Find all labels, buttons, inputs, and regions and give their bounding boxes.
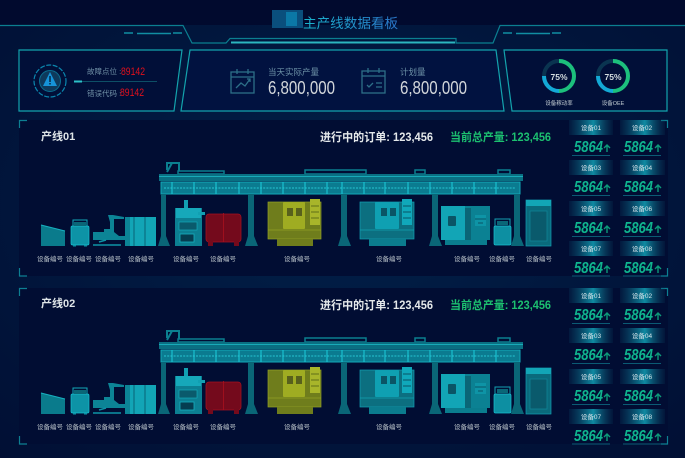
machine labels: 设备编号 — [454, 254, 480, 263]
total output: 当前总产量: 123,456 — [450, 130, 551, 144]
machine labels: 设备编号 — [376, 422, 402, 431]
actual output: 当天实际产量 — [268, 67, 320, 77]
device cards: 设备05 — [581, 372, 601, 381]
machine labels: 设备编号 — [489, 254, 516, 263]
donut: utilisation: 75% — [550, 72, 568, 82]
machine labels: 设备编号 — [37, 422, 64, 431]
fault points: 89142 — [121, 66, 145, 78]
error code: 89142 — [120, 87, 144, 99]
icon: actual output calendar — [231, 69, 254, 93]
device cards: 设备07 — [581, 412, 601, 421]
machine labels: 设备编号 — [128, 254, 154, 263]
machine labels: 设备编号 — [66, 422, 92, 431]
device cards — [569, 120, 665, 277]
donut: OEE: 75% — [604, 72, 622, 82]
device cards: 5864 — [624, 388, 653, 405]
title — [272, 10, 399, 31]
machine labels: 设备编号 — [173, 422, 200, 431]
total output: 当前总产量: 123,456 — [450, 298, 551, 312]
machine labels: 设备编号 — [454, 422, 480, 431]
machine labels — [37, 422, 552, 431]
device cards: 设备07 — [581, 244, 601, 253]
device cards: 设备02 — [632, 123, 652, 132]
machine labels: 设备编号 — [66, 254, 92, 263]
planned output: 6,800,000 — [400, 78, 467, 98]
device cards: 5864 — [574, 428, 603, 445]
machine labels: 设备编号 — [95, 422, 122, 431]
device cards: 5864 — [574, 307, 603, 324]
machine labels: 设备编号 — [210, 422, 236, 431]
device cards: 设备03 — [581, 331, 601, 340]
machine labels: 设备编号 — [210, 254, 236, 263]
device cards: 5864 — [574, 220, 603, 237]
device cards: 设备08 — [632, 412, 652, 421]
device cards: 5864 — [574, 260, 603, 277]
machine labels: 设备编号 — [284, 254, 310, 263]
device cards: 5864 — [574, 179, 603, 196]
donut: utilisation — [544, 61, 574, 107]
error code: 错误代码 : — [87, 88, 121, 98]
panel: alarms — [19, 50, 182, 111]
device cards: 设备04 — [632, 331, 652, 340]
device cards: 5864 — [574, 347, 603, 364]
device cards: 设备02 — [632, 291, 652, 300]
machine labels: 设备编号 — [526, 254, 552, 263]
machine labels — [37, 254, 552, 263]
icon: warning — [34, 65, 66, 97]
error code — [87, 87, 144, 99]
device cards: 设备08 — [632, 244, 652, 253]
device cards: 5864 — [574, 388, 603, 405]
machine labels: 设备编号 — [95, 254, 122, 263]
machine labels: 设备编号 — [376, 254, 402, 263]
device cards: 设备06 — [632, 204, 652, 213]
donut: OEE: 设备OEE — [602, 99, 625, 107]
device cards: 5864 — [624, 139, 653, 156]
production line machines — [41, 163, 551, 246]
fault points — [87, 66, 145, 78]
device cards: 5864 — [624, 428, 653, 445]
donut: utilisation: 设备稼动率 — [545, 99, 573, 107]
donut: OEE — [598, 61, 628, 107]
panel: line 02 — [19, 288, 668, 445]
heading: 产线02 — [41, 296, 75, 310]
actual output — [268, 67, 335, 98]
device cards: 设备01 — [581, 123, 601, 132]
machine labels: 设备编号 — [128, 422, 154, 431]
title: 主产线数据看板 — [303, 16, 399, 31]
machine labels: 设备编号 — [489, 422, 516, 431]
panel: line 01 — [19, 120, 668, 277]
panel: output — [181, 50, 504, 111]
orders in progress: 进行中的订单: 123,456 — [320, 298, 433, 312]
divider — [74, 80, 157, 82]
heading: 产线01 — [41, 129, 75, 143]
actual output: 6,800,000 — [268, 78, 335, 98]
machine labels: 设备编号 — [284, 422, 310, 431]
orders in progress: 进行中的订单: 123,456 — [320, 130, 433, 144]
machine labels: 设备编号 — [526, 422, 552, 431]
icon: plan calendar — [362, 68, 385, 93]
device cards: 设备03 — [581, 163, 601, 172]
device cards: 5864 — [624, 347, 653, 364]
device cards: 设备04 — [632, 163, 652, 172]
device cards: 5864 — [624, 179, 653, 196]
device cards: 设备01 — [581, 291, 601, 300]
device cards: 5864 — [624, 260, 653, 277]
device cards: 5864 — [624, 220, 653, 237]
device cards: 设备06 — [632, 372, 652, 381]
machine labels: 设备编号 — [173, 254, 200, 263]
production line machines — [41, 331, 551, 414]
device cards: 5864 — [624, 307, 653, 324]
planned output — [400, 67, 467, 98]
machine labels: 设备编号 — [37, 254, 64, 263]
fault points: 故障点位 : — [87, 66, 121, 76]
header frame — [0, 26, 685, 44]
device cards: 设备05 — [581, 204, 601, 213]
device cards — [569, 288, 665, 445]
planned output: 计划量 — [400, 67, 426, 77]
panel: rates — [504, 50, 667, 111]
device cards: 5864 — [574, 139, 603, 156]
